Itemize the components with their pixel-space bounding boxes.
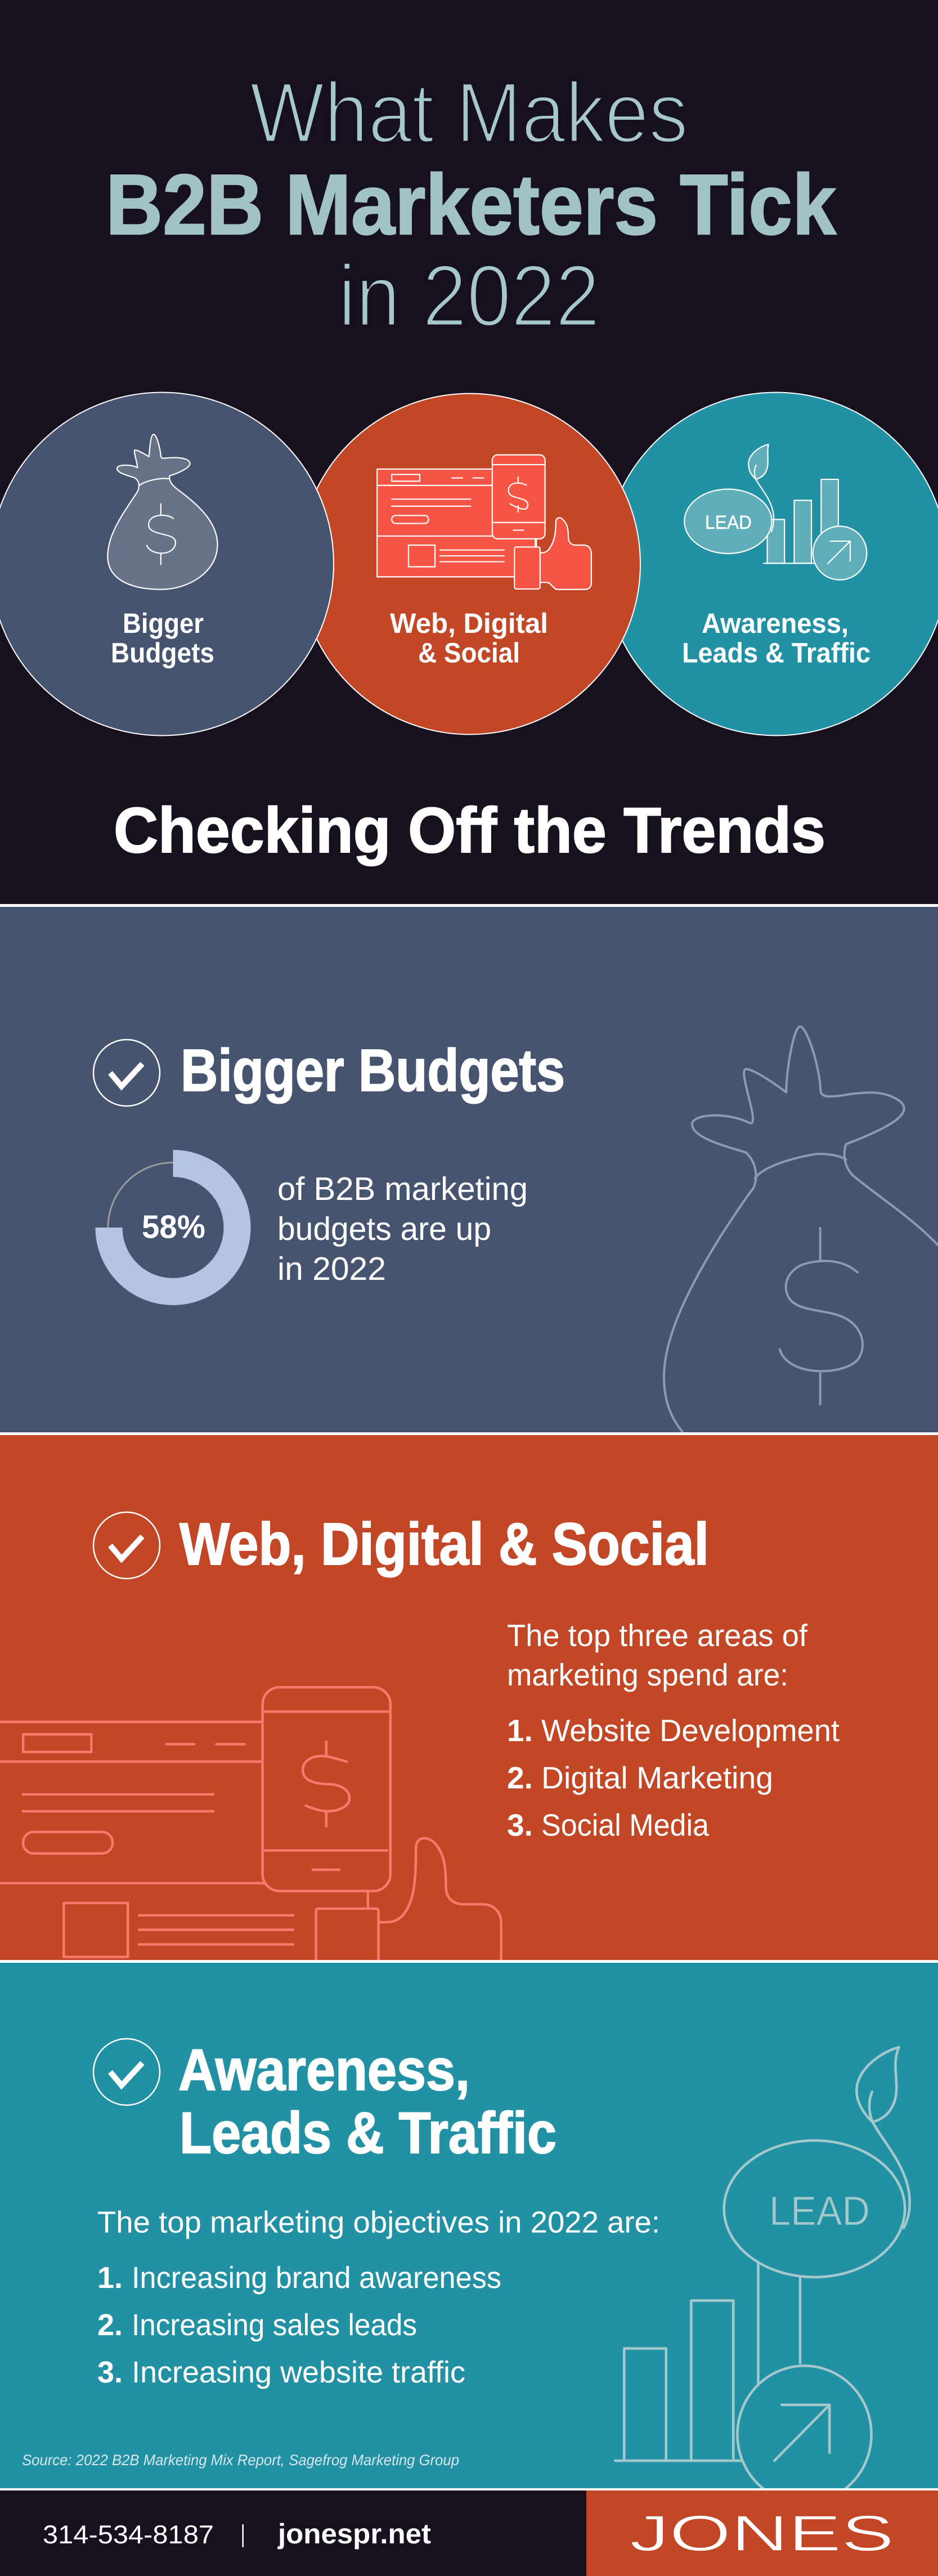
text block: marketing spend are: xyxy=(507,1657,788,1692)
list: top spend areas: Digital Marketing xyxy=(541,1760,773,1795)
circle label: Leads & Traffic xyxy=(682,637,870,668)
circle label: Bigger xyxy=(123,608,204,639)
icon label: LEAD: LEAD xyxy=(705,512,752,533)
circle label xyxy=(682,608,870,668)
icon: large money bag outline xyxy=(664,1027,938,1432)
list: top objectives: 2. xyxy=(97,2308,123,2342)
list: top spend areas: 2. xyxy=(507,1760,533,1795)
icon: check mark xyxy=(93,1040,160,1106)
title: in 2022 xyxy=(338,247,600,344)
icon: large website, phone and thumbs up outline xyxy=(0,1687,501,1973)
panel: bigger budgets xyxy=(0,904,938,1432)
title: B2B Marketers Tick xyxy=(106,157,836,253)
circle label: Budgets xyxy=(111,637,214,668)
circle label: Web, Digital xyxy=(390,608,548,639)
text block: The top marketing objectives in 2022 are: xyxy=(97,2205,660,2239)
divider xyxy=(242,2524,244,2547)
icon: money bag xyxy=(107,434,218,590)
logo: Jones: JONES xyxy=(630,2506,894,2562)
circle label: & Social xyxy=(418,637,520,668)
text block: of B2B marketing xyxy=(277,1171,528,1207)
phone number: 314-534-8187 xyxy=(43,2520,214,2549)
list: top spend areas: Social Media xyxy=(541,1808,709,1842)
text block: The top three areas of xyxy=(507,1618,808,1653)
panel: awareness, leads and traffic xyxy=(0,1960,938,2503)
panel: trend circles xyxy=(0,393,938,736)
heading: Awareness, xyxy=(178,2038,470,2103)
icon: large lead, plant and bar chart outline xyxy=(616,2047,910,2503)
icon: check mark xyxy=(93,1512,160,1579)
icon label: LEAD: LEAD xyxy=(769,2188,870,2234)
list: top objectives: Increasing sales leads xyxy=(132,2308,417,2342)
list: top spend areas xyxy=(507,1713,840,1842)
text block: in 2022 xyxy=(277,1251,386,1287)
icon: check mark xyxy=(93,2039,160,2105)
source note: Source: 2022 B2B Marketing Mix Report, Sagefrog Marketing Group xyxy=(22,2452,459,2469)
text block xyxy=(507,1618,808,1692)
panel: web, digital and social xyxy=(0,1432,938,1973)
circle: awareness, leads and traffic xyxy=(604,393,938,736)
circle: web, digital and social xyxy=(299,394,640,735)
donut chart: 58%: 58% xyxy=(142,1208,205,1246)
heading: checking off the trends: Checking Off the Trends xyxy=(114,795,825,866)
icon: website, phone and thumbs up xyxy=(377,455,591,590)
list: top spend areas: 3. xyxy=(507,1808,533,1842)
list: top objectives: 3. xyxy=(97,2355,123,2389)
circle label: Awareness, xyxy=(702,608,849,639)
text block: budgets are up xyxy=(277,1211,491,1247)
circle: bigger budgets xyxy=(0,393,334,736)
footer xyxy=(0,2488,938,2576)
title xyxy=(106,65,836,344)
list: top objectives: 1. xyxy=(97,2261,123,2295)
list: top objectives xyxy=(97,2261,501,2389)
heading: Bigger Budgets xyxy=(181,1037,565,1104)
heading xyxy=(178,2038,556,2166)
list: top spend areas: 1. xyxy=(507,1713,533,1748)
list: top spend areas: Website Development xyxy=(541,1713,840,1748)
website: jonespr.net xyxy=(277,2518,431,2550)
text block xyxy=(277,1171,528,1287)
circle label xyxy=(111,608,214,668)
list: top objectives: Increasing website traffic xyxy=(132,2355,465,2389)
title: What Makes xyxy=(250,65,688,161)
icon: lead, plant and bar chart xyxy=(684,444,867,580)
list: top objectives: Increasing brand awareness xyxy=(132,2261,501,2295)
circle label xyxy=(390,608,548,668)
donut chart: 58% xyxy=(108,1162,237,1292)
heading: Web, Digital & Social xyxy=(179,1511,709,1577)
heading: Leads & Traffic xyxy=(179,2101,556,2166)
